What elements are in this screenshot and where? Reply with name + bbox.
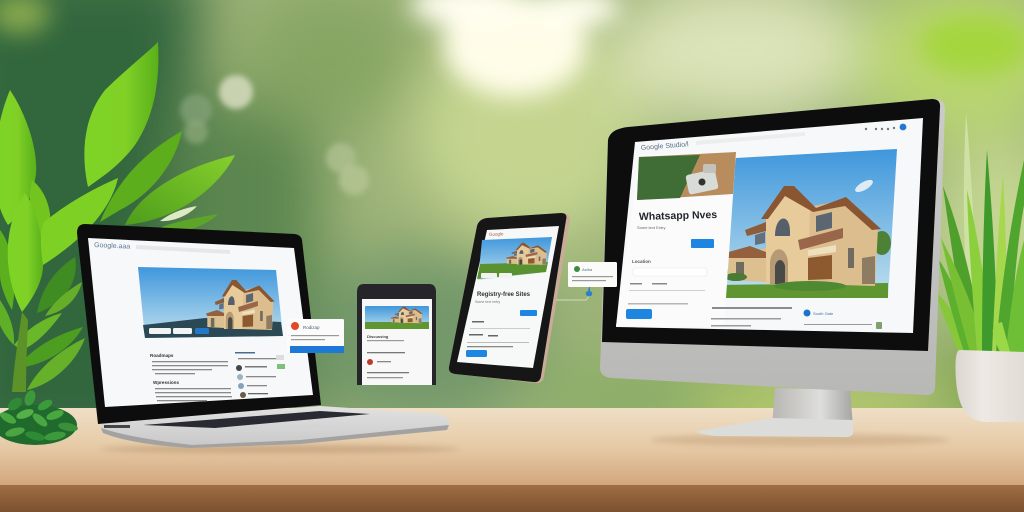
card submit button bbox=[626, 309, 652, 319]
monitor body bbox=[600, 99, 945, 395]
leaf: diagonal bbox=[41, 178, 118, 265]
leaf: dark fill behind bbox=[37, 257, 76, 313]
popup icon bbox=[574, 266, 580, 272]
lower panels bbox=[711, 307, 882, 329]
tablet body bbox=[449, 213, 570, 383]
bush bbox=[0, 389, 79, 445]
hero photo bbox=[713, 149, 897, 298]
popup pin bbox=[586, 287, 592, 296]
tablet subtext: Some text entry bbox=[475, 300, 500, 304]
plant pot bbox=[956, 350, 1024, 422]
card blue button bbox=[691, 239, 714, 248]
address bar bbox=[136, 245, 230, 254]
tablet submit button bbox=[466, 350, 487, 357]
overlay form card bbox=[616, 152, 736, 327]
laptop base bbox=[100, 406, 450, 448]
leaf: tall top bbox=[84, 42, 158, 187]
leaf: small left bbox=[30, 180, 50, 255]
laptop popup card bbox=[287, 319, 344, 353]
sidebar list bbox=[235, 352, 285, 398]
connector line bbox=[556, 295, 590, 300]
leaf: middle right bbox=[100, 131, 182, 222]
phone screen bbox=[362, 299, 432, 385]
leaf: centre big bbox=[8, 193, 43, 312]
popup title: Rodizap bbox=[303, 325, 320, 330]
popup icon bbox=[291, 322, 299, 330]
tablet popup card bbox=[568, 262, 617, 296]
monitor bbox=[600, 99, 945, 437]
card heading: Whatsapp Nves bbox=[639, 209, 717, 223]
card subtext: Some text Entry bbox=[637, 225, 665, 230]
leaf back lower bbox=[150, 214, 218, 233]
monitor stand bbox=[697, 388, 853, 437]
phone body bbox=[357, 284, 436, 385]
leaf: lower left bbox=[14, 313, 62, 350]
article text bbox=[150, 353, 232, 401]
article text: Wpressions bbox=[153, 380, 179, 385]
browser logo: Google.aaa bbox=[94, 242, 130, 251]
tablet form text bbox=[467, 321, 530, 347]
popup button bbox=[290, 346, 344, 353]
browser logo text: Google Studio/l bbox=[641, 141, 689, 152]
monitor screen bbox=[616, 118, 923, 333]
card label: Location bbox=[632, 259, 651, 264]
left plant bbox=[0, 42, 235, 392]
tablet logo: Google bbox=[489, 231, 504, 237]
leaf: far right bbox=[125, 155, 235, 225]
toolbar bbox=[696, 124, 906, 145]
smartphone bbox=[357, 284, 436, 385]
laptop lid bbox=[77, 224, 321, 424]
tablet screen bbox=[457, 226, 559, 368]
laptop bbox=[77, 224, 450, 448]
tablet bbox=[449, 213, 570, 383]
right plant bbox=[936, 113, 1024, 352]
leaf: far left bbox=[0, 90, 36, 225]
tablet heading: Registry-free Sites bbox=[477, 292, 531, 298]
lower panels: South Gate bbox=[813, 311, 834, 316]
laptop screen bbox=[88, 238, 313, 407]
phone text: Discussing bbox=[367, 334, 389, 339]
popup title: Astha bbox=[582, 267, 593, 272]
wooden table bbox=[0, 408, 1024, 512]
article text: Roadmaps bbox=[150, 353, 174, 358]
tablet blue button bbox=[520, 310, 537, 316]
tablet photo bbox=[477, 237, 552, 280]
phone photo bbox=[365, 306, 429, 329]
hero photo bbox=[138, 267, 283, 338]
card image bbox=[637, 152, 736, 200]
